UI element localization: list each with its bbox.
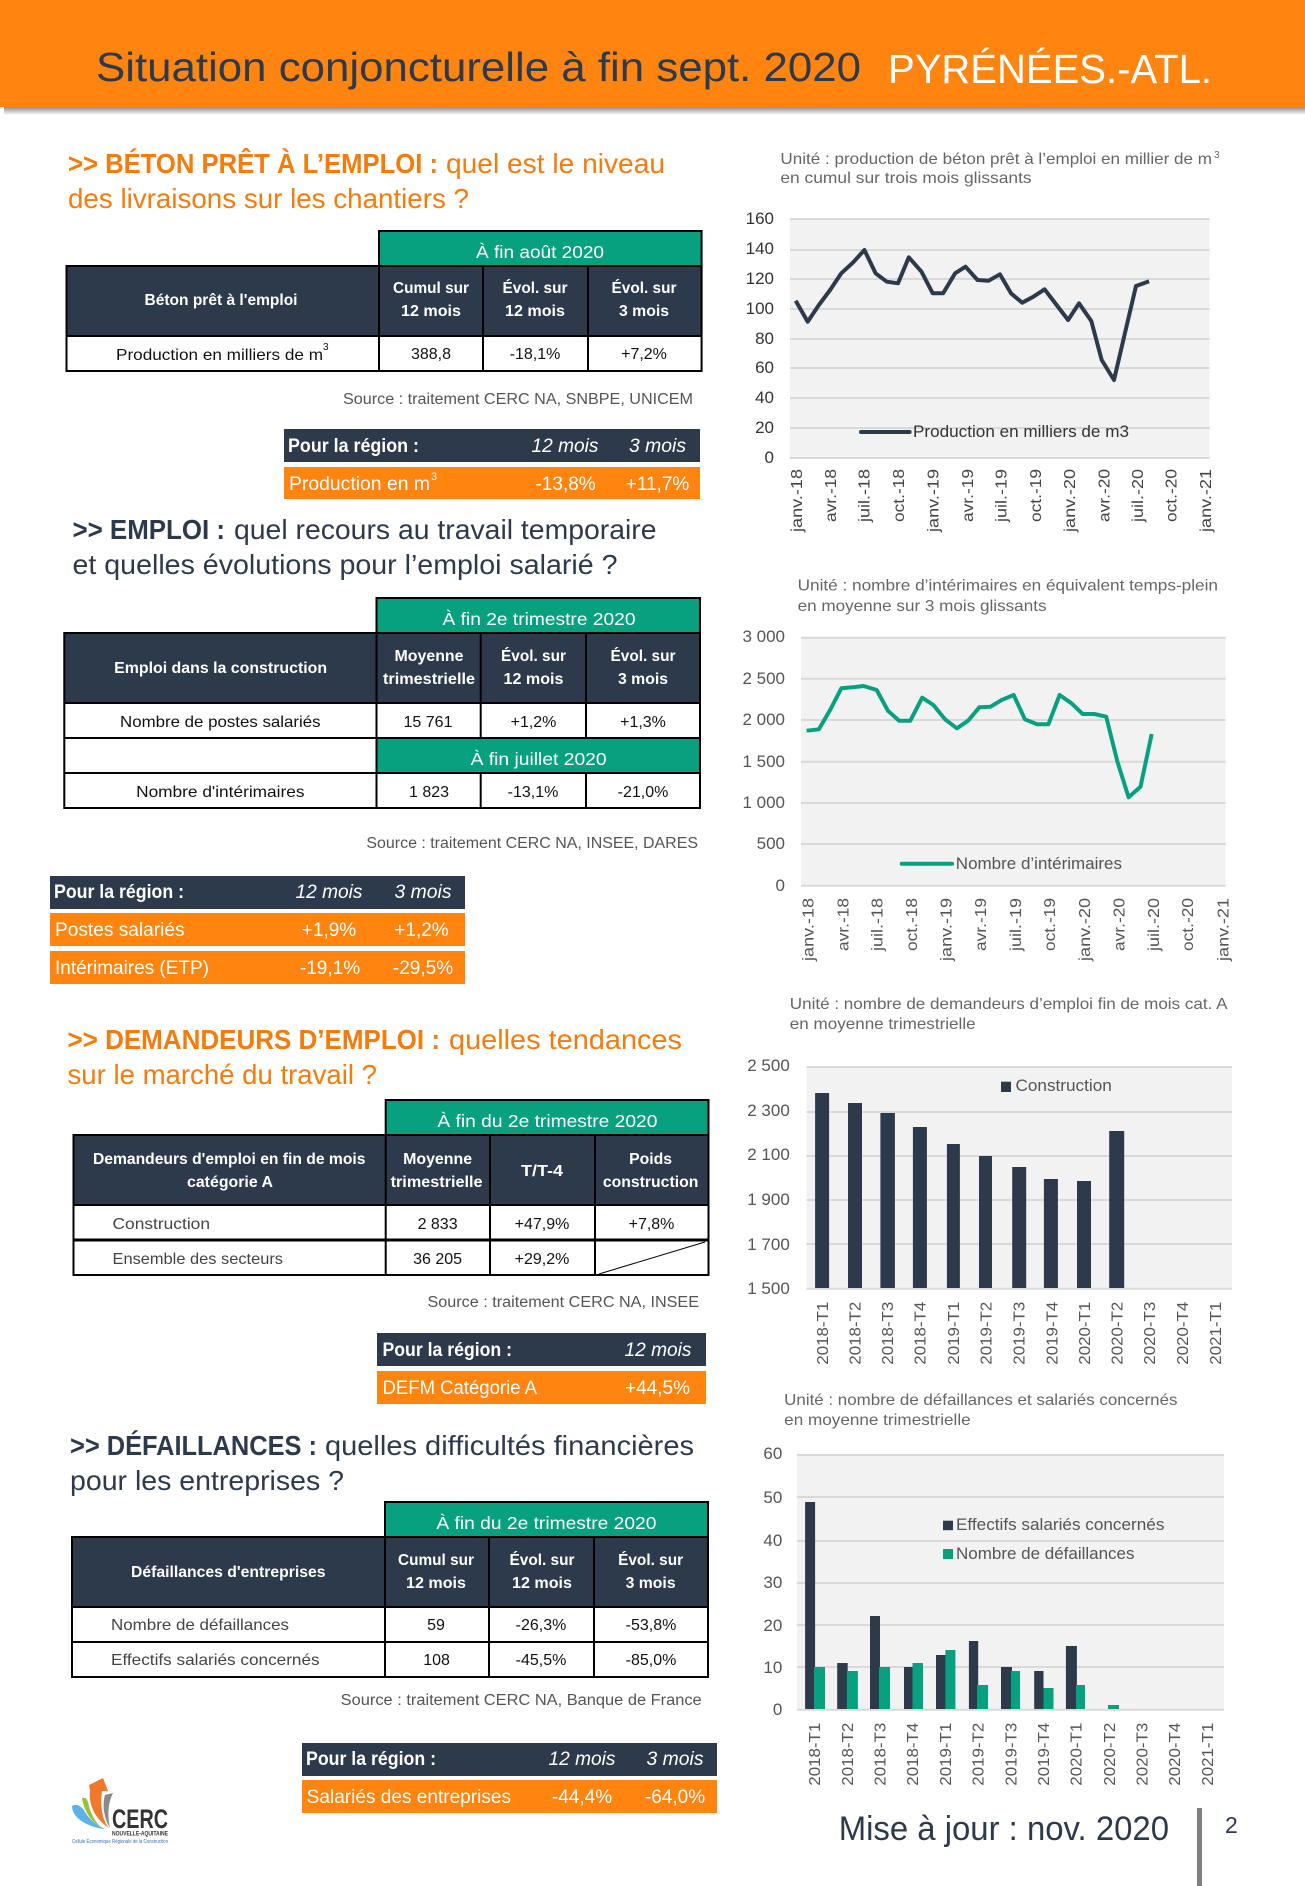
caption: béton chart: Unité : production de béton prêt à l’emploi en millier de m — [780, 151, 1212, 168]
table: défaillances: 12 mois — [512, 1575, 572, 1592]
table: demandeurs d'emploi: Construction — [112, 1216, 210, 1233]
bar chart: défaillances — [763, 1444, 1224, 1786]
line chart: béton: oct.-18 — [891, 469, 908, 522]
table: emploi: -21,0% — [618, 784, 668, 801]
line chart: béton: 100 — [746, 299, 774, 318]
region box: demandeurs d'emploi — [377, 1333, 706, 1404]
bar chart: défaillances: 50 — [763, 1488, 782, 1507]
line chart: intérimaires: 3 000 — [742, 627, 785, 646]
bar chart: défaillances: 2019-T1 — [938, 1723, 955, 1786]
line chart: béton: janv.-19 — [926, 469, 943, 533]
line chart: intérimaires: 2 500 — [742, 669, 785, 688]
table: demandeurs d'emploi: +7,8% — [629, 1216, 674, 1233]
line chart: béton: 40 — [755, 388, 774, 407]
table: demandeurs d'emploi: Ensemble des secteurs — [112, 1251, 283, 1268]
line chart: béton: juil.-18 — [857, 469, 874, 523]
table: demandeurs d'emploi: construction — [603, 1174, 698, 1191]
table: emploi: +1,2% — [511, 714, 556, 731]
legend: intérimaires: Nombre d’intérimaires — [956, 855, 1122, 873]
line chart: intérimaires: 2 000 — [742, 710, 785, 729]
heading: demandeurs d'emploi: >> DEMANDEURS D’EMPLOI : — [68, 1024, 440, 1055]
table: défaillances: -45,5% — [516, 1652, 566, 1669]
region box: défaillances — [302, 1743, 717, 1813]
chart panel: intérimaires — [742, 578, 1233, 962]
line chart: béton: avr.-20 — [1097, 469, 1114, 522]
region box: béton: 3 mois — [629, 436, 687, 457]
heading: défaillances: quelles difficultés financières — [325, 1430, 694, 1461]
bar chart: défaillances: 2020-T1 — [1069, 1723, 1086, 1786]
caption: béton chart: en cumul sur trois mois glissants — [780, 170, 1032, 187]
bar chart: défaillances: 20 — [763, 1616, 782, 1635]
line chart: intérimaires: janv.-19 — [939, 898, 956, 962]
region box: demandeurs d'emploi: 12 mois — [624, 1340, 692, 1361]
bar chart: demandeurs: 1 500 — [747, 1279, 790, 1298]
line chart: béton: 60 — [755, 358, 774, 377]
line chart: béton: juil.-19 — [994, 469, 1011, 523]
table: demandeurs d'emploi: +47,9% — [515, 1216, 569, 1233]
bar chart: défaillances: 2020-T4 — [1167, 1723, 1184, 1786]
region box: défaillances: -44,4% — [552, 1787, 612, 1808]
region box: emploi: Pour la région : — [54, 882, 184, 903]
table: demandeurs d'emploi: 2 833 — [418, 1216, 458, 1233]
bar chart: demandeurs: 1 700 — [747, 1235, 790, 1254]
bar chart: défaillances: 0 — [773, 1700, 782, 1719]
table: béton: 12 mois — [401, 303, 461, 320]
table: emploi: Nombre de postes salariés — [120, 714, 321, 731]
table: emploi: À fin 2e trimestre 2020 — [442, 609, 636, 629]
table: demandeurs d'emploi — [74, 1100, 708, 1275]
table: emploi — [64, 598, 700, 808]
table: demandeurs d'emploi: +29,2% — [515, 1251, 569, 1268]
table: béton: +7,2% — [621, 346, 667, 363]
table: défaillances: 12 mois — [406, 1575, 466, 1592]
heading: béton: >> BÉTON PRÊT À L’EMPLOI : — [68, 148, 438, 179]
caption: demandeurs chart: en moyenne trimestrielle — [790, 1016, 976, 1033]
table: emploi: Moyenne — [394, 648, 464, 665]
bar chart: demandeurs: 2019-T3 — [1012, 1302, 1028, 1365]
panel: béton prêt à l'emploi — [66, 148, 702, 499]
bar chart: défaillances: 2019-T3 — [1003, 1723, 1020, 1786]
table: emploi: trimestrielle — [383, 671, 475, 688]
line chart: béton — [746, 209, 1215, 533]
bar chart: défaillances: 10 — [763, 1658, 782, 1677]
table: emploi: Évol. sur — [610, 646, 676, 665]
source: défaillances: Source : traitement CERC NA, Banque de France — [341, 1692, 702, 1709]
caption: demandeurs chart: Unité : nombre de demandeurs d’emploi fin de mois cat. A — [790, 996, 1228, 1013]
line chart: béton: 0 — [765, 448, 774, 467]
bar chart: défaillances: 30 — [763, 1573, 782, 1592]
region box: emploi: -19,1% — [300, 958, 360, 979]
line chart: béton: 160 — [746, 209, 774, 228]
bar chart: défaillances: 2021-T1 — [1200, 1723, 1217, 1786]
region box: béton: +11,7% — [626, 474, 689, 495]
line chart: béton: 120 — [746, 269, 774, 288]
table: béton: Évol. sur — [502, 278, 568, 297]
table: demandeurs d'emploi: T/T-4 — [521, 1163, 563, 1180]
region box: défaillances: 3 mois — [646, 1749, 704, 1770]
bar chart: demandeurs: 2019-T2 — [979, 1302, 996, 1365]
legend: production: Production en milliers de m3 — [913, 423, 1129, 441]
line chart: béton: avr.-18 — [823, 469, 840, 522]
region box: demandeurs d'emploi: DEFM Catégorie A — [382, 1378, 537, 1399]
line chart: intérimaires: janv.-21 — [1216, 898, 1233, 962]
footer: divider bar — [1197, 1808, 1202, 1886]
table: emploi: 1 823 — [409, 784, 449, 801]
table: défaillances: Évol. sur — [510, 1550, 574, 1569]
line chart: intérimaires: janv.-18 — [801, 898, 818, 962]
line chart: béton: 20 — [755, 418, 774, 437]
chart panel: défaillances — [763, 1392, 1224, 1786]
table: défaillances: 59 — [427, 1617, 445, 1634]
line chart: intérimaires: juil.-18 — [870, 898, 887, 952]
logo: CERC: Cellule Économique Régionale de la Construction — [72, 1838, 168, 1845]
bar chart: demandeurs: 2019-T1 — [946, 1302, 963, 1365]
region box: emploi: -29,5% — [393, 958, 453, 979]
line chart: intérimaires: avr.-20 — [1112, 898, 1128, 951]
table: demandeurs d'emploi: trimestrielle — [391, 1174, 483, 1191]
line chart: intérimaires: oct.-18 — [904, 898, 921, 951]
bar chart: défaillances: 2020-T2 — [1102, 1723, 1119, 1786]
bar chart: demandeurs: 2018-T1 — [815, 1302, 832, 1365]
table: béton: À fin août 2020 — [476, 242, 604, 262]
table: emploi: Évol. sur — [501, 646, 566, 665]
bar chart: défaillances: 2018-T3 — [873, 1723, 890, 1786]
bar chart: défaillances: 2018-T2 — [840, 1723, 857, 1786]
table: béton: 3 — [323, 342, 329, 353]
line chart: intérimaires: oct.-20 — [1180, 898, 1197, 951]
heading: béton: quel est le niveau — [446, 148, 665, 179]
table: demandeurs d'emploi: Demandeurs d'emploi en fin de mois — [93, 1151, 366, 1168]
line chart: intérimaires: juil.-19 — [1008, 898, 1025, 952]
bar chart: demandeurs: 1 900 — [747, 1190, 790, 1209]
legend: construction: Construction — [1016, 1077, 1112, 1095]
bar chart: demandeurs: 2018-T2 — [847, 1302, 864, 1365]
heading: emploi: quel recours au travail temporaire — [234, 514, 656, 545]
region box: défaillances: 12 mois — [548, 1749, 616, 1770]
region box: béton: 3 — [431, 471, 437, 483]
heading: emploi: et quelles évolutions pour l’emploi salarié ? — [72, 549, 618, 580]
legend: défaillances — [943, 1516, 1164, 1563]
bar chart: demandeurs: 2020-T1 — [1077, 1302, 1094, 1365]
table: béton: -18,1% — [510, 346, 560, 363]
line chart: intérimaires: 1 000 — [742, 793, 785, 812]
heading: demandeurs d'emploi — [68, 1024, 682, 1090]
region box: emploi: 3 mois — [394, 882, 452, 903]
logo: CERC — [72, 1778, 168, 1845]
table: béton: 12 mois — [505, 303, 565, 320]
line chart: intérimaires: juil.-20 — [1146, 898, 1163, 952]
bar chart: demandeurs — [747, 1056, 1232, 1365]
heading: défaillances: >> DÉFAILLANCES : — [70, 1430, 317, 1461]
table: emploi: 3 mois — [618, 671, 668, 688]
table: défaillances: -53,8% — [626, 1617, 676, 1634]
table: défaillances: Cumul sur — [398, 1552, 474, 1569]
region box: béton: Production en m — [289, 474, 430, 495]
table: demandeurs d'emploi: 36 205 — [413, 1251, 462, 1268]
table: défaillances: 108 — [423, 1652, 450, 1669]
title: Situation conjoncturelle à fin sept. 2020 — [96, 44, 861, 90]
table: défaillances: 3 mois — [626, 1575, 676, 1592]
caption: intérimaires chart: en moyenne sur 3 mois glissants — [798, 598, 1046, 615]
footer: update date: Mise à jour : nov. 2020 — [839, 1810, 1169, 1848]
line chart: béton: oct.-19 — [1028, 469, 1045, 522]
caption: intérimaires chart: Unité : nombre d’intérimaires en équivalent temps-plein — [798, 578, 1218, 595]
source: béton: Source : traitement CERC NA, SNBPE, UNICEM — [343, 391, 693, 408]
table: défaillances — [72, 1502, 708, 1677]
legend: défaillances: Effectifs salariés concernés — [956, 1516, 1164, 1534]
table: défaillances: -26,3% — [516, 1617, 566, 1634]
line chart: béton: janv.-21 — [1198, 469, 1215, 533]
bar chart: défaillances: 2018-T1 — [807, 1723, 824, 1786]
bar chart: défaillances: 40 — [763, 1531, 782, 1550]
bar chart: demandeurs: 2019-T4 — [1044, 1302, 1061, 1365]
caption: défaillances chart: Unité : nombre de défaillances et salariés concernés — [784, 1392, 1178, 1409]
footer: page number: 2 — [1225, 1812, 1238, 1838]
bar chart: demandeurs: 2018-T4 — [913, 1302, 930, 1365]
table: emploi: 15 761 — [404, 714, 453, 731]
heading: défaillances: pour les entreprises ? — [70, 1465, 344, 1496]
legend: défaillances: Nombre de défaillances — [956, 1545, 1134, 1563]
heading: demandeurs d'emploi: sur le marché du travail ? — [68, 1059, 377, 1090]
department name: PYRÉNÉES.-ATL. — [888, 46, 1212, 92]
bar chart: défaillances: 60 — [763, 1444, 782, 1463]
table: emploi: +1,3% — [620, 714, 666, 731]
table: béton — [66, 231, 702, 371]
source: emploi: Source : traitement CERC NA, INSEE, DARES — [366, 835, 698, 852]
line chart: intérimaires: janv.-20 — [1077, 898, 1094, 962]
line chart: béton: janv.-18 — [789, 469, 806, 533]
table: défaillances: Nombre de défaillances — [111, 1617, 289, 1634]
table: emploi: -13,1% — [508, 784, 558, 801]
caption: béton chart — [780, 150, 1220, 187]
table: défaillances: -85,0% — [626, 1652, 676, 1669]
logo: CERC: NOUVELLE-AQUITAINE — [112, 1832, 168, 1838]
chart panel: production de béton — [746, 150, 1220, 533]
region box: emploi — [50, 876, 465, 984]
region box: béton: -13,8% — [535, 474, 596, 495]
heading: demandeurs d'emploi: quelles tendances — [449, 1024, 682, 1055]
line chart: intérimaires: oct.-19 — [1042, 898, 1059, 951]
bar chart: défaillances: 2019-T4 — [1036, 1723, 1053, 1786]
heading: béton — [68, 148, 665, 214]
bar chart: demandeurs: 2018-T3 — [880, 1302, 897, 1365]
region box: emploi: 12 mois — [296, 882, 363, 903]
line chart: béton: janv.-20 — [1062, 469, 1079, 533]
source: demandeurs d'emploi: Source : traitement CERC NA, INSEE — [428, 1294, 699, 1311]
heading: emploi — [72, 514, 656, 580]
table: emploi: Emploi dans la construction — [114, 660, 327, 677]
table: demandeurs d'emploi: catégorie A — [187, 1174, 273, 1191]
bar chart: demandeurs: 2 100 — [747, 1145, 790, 1164]
bar chart: défaillances: 2020-T3 — [1135, 1723, 1152, 1786]
caption: défaillances chart: en moyenne trimestrielle — [784, 1412, 971, 1429]
region box: emploi: +1,2% — [394, 920, 449, 941]
region box: défaillances: Salariés des entreprises — [307, 1787, 511, 1808]
bar chart: demandeurs: 2020-T2 — [1110, 1302, 1127, 1365]
region box: demandeurs d'emploi: Pour la région : — [382, 1340, 512, 1361]
table: béton: Béton prêt à l'emploi — [144, 292, 298, 309]
region box: emploi: Intérimaires (ETP) — [55, 958, 209, 979]
line chart: intérimaires: 1 500 — [742, 752, 785, 771]
panel: emploi — [50, 514, 700, 984]
region box: béton: Pour la région : — [288, 436, 419, 457]
line chart: béton: juil.-20 — [1130, 469, 1147, 523]
caption: béton chart: 3 — [1214, 150, 1220, 161]
table: béton: 3 mois — [619, 303, 669, 320]
table: défaillances: Évol. sur — [618, 1550, 683, 1569]
region box: emploi: +1,9% — [302, 920, 356, 941]
table: défaillances: À fin du 2e trimestre 2020 — [436, 1513, 657, 1533]
table: demandeurs d'emploi: À fin du 2e trimestre 2020 — [437, 1111, 658, 1131]
region box: emploi: Postes salariés — [55, 920, 185, 941]
caption: défaillances chart — [784, 1392, 1178, 1429]
line chart: intérimaires: avr.-19 — [973, 898, 990, 951]
table: béton: Production en milliers de m — [116, 347, 323, 364]
line chart: intérimaires: 500 — [757, 834, 785, 853]
line chart: béton: avr.-19 — [960, 469, 977, 522]
chart panel: demandeurs d'emploi — [747, 996, 1232, 1365]
table: emploi: À fin juillet 2020 — [471, 749, 607, 769]
table: béton: 388,8 — [411, 346, 451, 363]
caption: intérimaires chart — [798, 578, 1218, 615]
line chart: béton: 140 — [746, 239, 774, 258]
table: demandeurs d'emploi: Moyenne — [403, 1151, 472, 1168]
table: défaillances: Défaillances d'entreprises — [131, 1564, 326, 1581]
table: défaillances: Effectifs salariés concernés — [111, 1652, 320, 1669]
caption: demandeurs chart — [790, 996, 1228, 1033]
bar chart: défaillances: 2019-T2 — [970, 1723, 988, 1786]
heading: défaillances — [70, 1430, 694, 1496]
bar chart: défaillances: 2018-T4 — [905, 1723, 922, 1786]
line chart: intérimaires — [742, 627, 1233, 962]
panel: demandeurs d'emploi — [68, 1024, 708, 1404]
table: demandeurs d'emploi: Poids — [629, 1151, 672, 1168]
region box: défaillances: -64,0% — [645, 1787, 705, 1808]
heading: béton: des livraisons sur les chantiers ? — [68, 183, 469, 214]
table: béton: Évol. sur — [612, 278, 676, 297]
region box: demandeurs d'emploi: +44,5% — [625, 1378, 690, 1399]
bar chart: demandeurs: 2020-T3 — [1142, 1302, 1159, 1365]
table: emploi: Nombre d'intérimaires — [136, 784, 304, 801]
logo: CERC: CERC — [112, 1804, 168, 1834]
line chart: béton: 80 — [755, 329, 774, 348]
bar chart: demandeurs: 2 500 — [747, 1056, 790, 1075]
bar chart: demandeurs: 2020-T4 — [1175, 1302, 1192, 1365]
table: béton: Cumul sur — [393, 280, 469, 297]
region box: béton: 12 mois — [532, 436, 599, 457]
region box: défaillances: Pour la région : — [306, 1749, 436, 1770]
panel: défaillances — [70, 1430, 717, 1813]
heading: emploi: >> EMPLOI : — [72, 514, 225, 545]
bar chart: demandeurs: 2 300 — [747, 1101, 790, 1120]
bar chart: demandeurs: 2021-T1 — [1208, 1302, 1225, 1365]
header banner — [0, 0, 1305, 115]
line chart: intérimaires: 0 — [776, 876, 785, 895]
line chart: béton: oct.-20 — [1164, 469, 1181, 522]
region box: béton — [284, 429, 700, 499]
line chart: intérimaires: avr.-18 — [835, 898, 852, 951]
table: emploi: 12 mois — [504, 671, 564, 688]
